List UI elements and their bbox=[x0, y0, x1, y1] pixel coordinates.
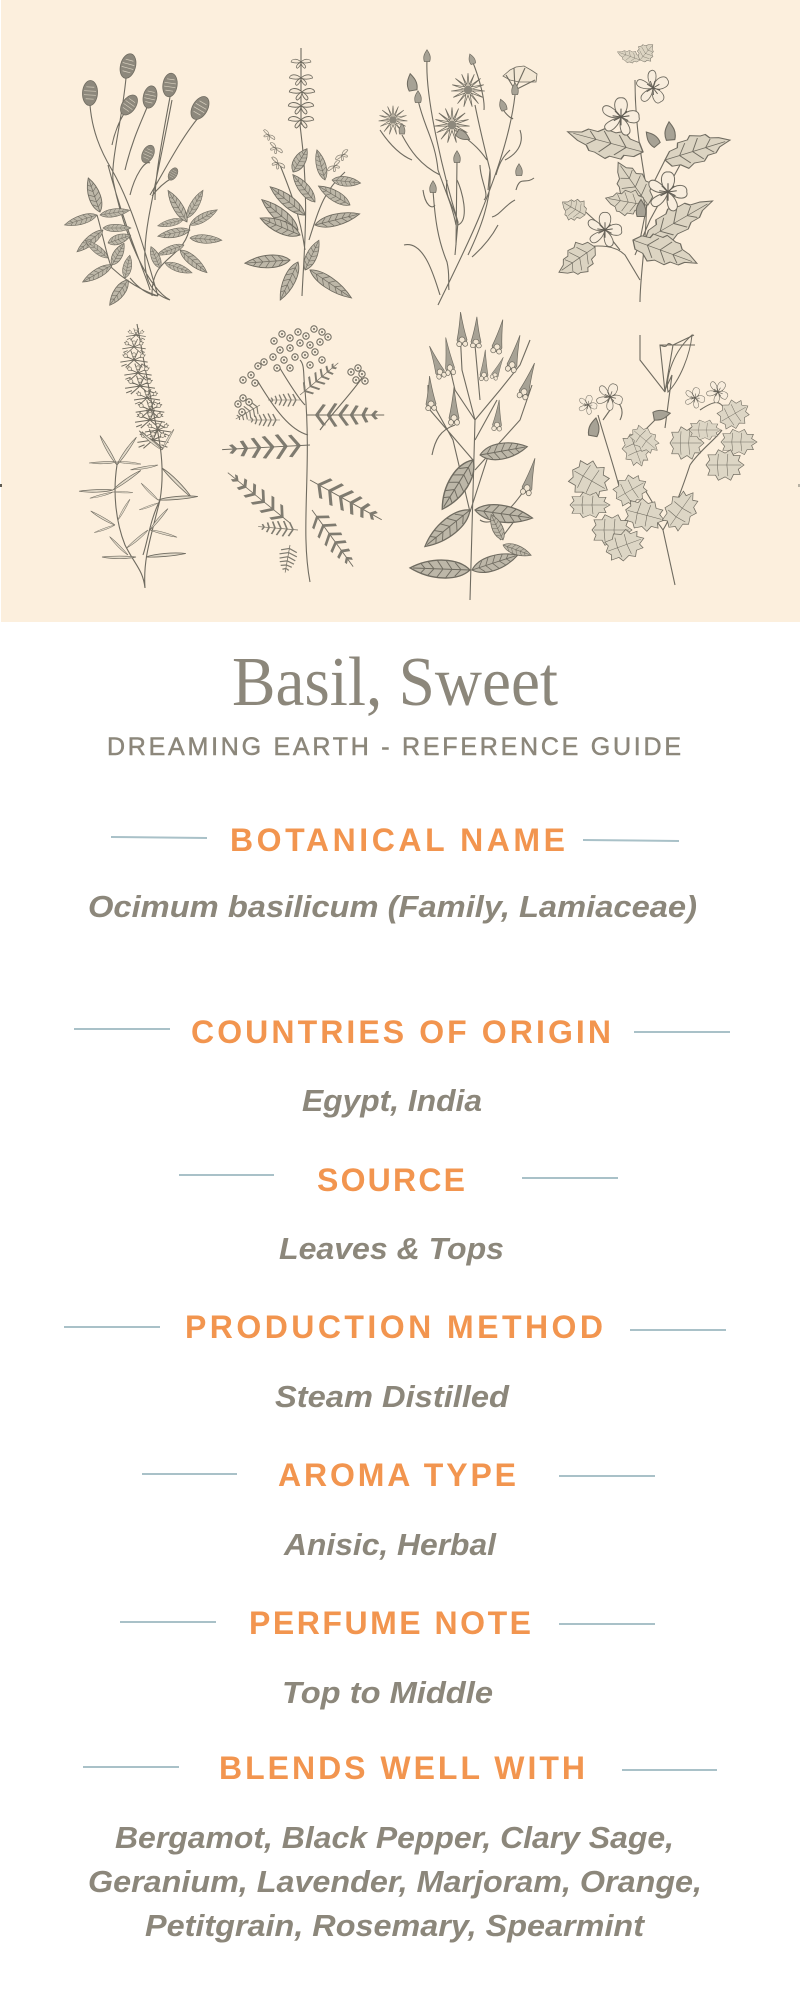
title: Basil, Sweet bbox=[232, 644, 559, 721]
text: countries value: Egypt, India bbox=[302, 1083, 482, 1118]
heading: countries of origin: COUNTRIES OF ORIGIN bbox=[191, 1014, 611, 1050]
icon: plant 2 sage bbox=[244, 48, 361, 303]
text: botanical name value: Ocimum basilicum (Family, Lamiaceae) bbox=[88, 889, 697, 924]
text: blends well with value: Bergamot, Black Pepper, Clary Sage, bbox=[115, 1820, 674, 1855]
icon: plant 8 celandine bbox=[564, 335, 757, 585]
text: production method value: Steam Distilled bbox=[275, 1379, 510, 1414]
decorative edge marks bbox=[0, 484, 800, 487]
text: source value: Leaves & Tops bbox=[279, 1231, 504, 1266]
text: blends well with value: Geranium, Lavender, Marjoram, Orange, bbox=[88, 1864, 702, 1899]
icon: plant 3 cornflower bbox=[379, 50, 537, 305]
heading: botanical name: BOTANICAL NAME bbox=[230, 822, 565, 858]
heading: blends well with: BLENDS WELL WITH bbox=[219, 1750, 585, 1786]
icon: plant 4 mallow bbox=[550, 38, 734, 302]
panel: botanical illustration header bbox=[0, 0, 800, 622]
icon: plant 6 tansy bbox=[221, 326, 388, 582]
text: perfume note value: Top to Middle bbox=[282, 1675, 493, 1710]
icon: plant 5 savory bbox=[79, 324, 198, 588]
heading: source: SOURCE bbox=[317, 1162, 465, 1198]
icon: plant 1 burnet bbox=[63, 52, 222, 308]
text: aroma type value: Anisic, Herbal bbox=[283, 1527, 497, 1562]
heading: perfume note: PERFUME NOTE bbox=[249, 1605, 531, 1641]
heading: aroma type: AROMA TYPE bbox=[278, 1457, 516, 1493]
subtitle: DREAMING EARTH - REFERENCE GUIDE bbox=[107, 733, 681, 761]
icon: plant 7 vervain bbox=[410, 312, 540, 600]
text: blends well with value: Petitgrain, Rosemary, Spearmint bbox=[145, 1908, 646, 1943]
text: blends well with value bbox=[88, 1820, 702, 1943]
heading: production method: PRODUCTION METHOD bbox=[185, 1309, 603, 1345]
